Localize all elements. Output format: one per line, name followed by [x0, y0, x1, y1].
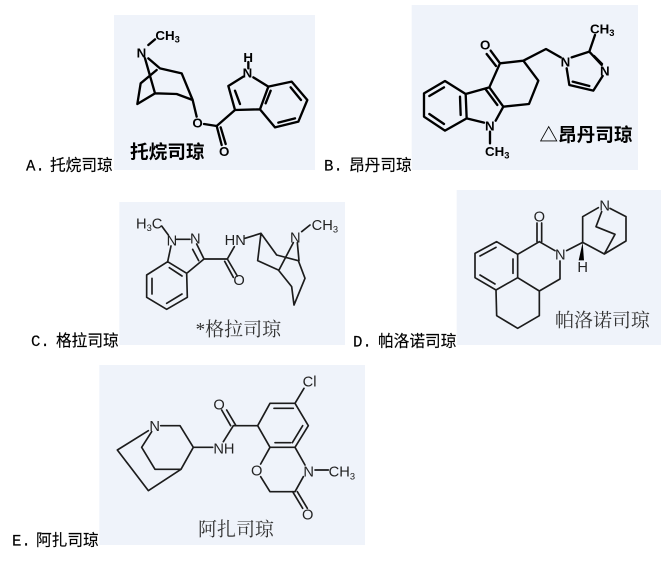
structure: granisetron molecule: N: [190, 231, 201, 247]
panel: D palonosetron: [457, 190, 661, 345]
structure: tropisetron molecule: [137, 28, 307, 159]
panel caption: azasetron: 阿扎司琼: [198, 518, 275, 540]
label: option E: 阿扎司琼: [36, 532, 99, 550]
structure: palonosetron molecule: O: [534, 210, 545, 226]
structure: granisetron molecule: H: [136, 216, 147, 232]
label: option C: 格拉司琼: [56, 332, 119, 351]
structure: ondansetron molecule: [424, 21, 614, 161]
structure: ondansetron molecule: N: [485, 119, 495, 134]
structure: azasetron molecule: N: [149, 419, 160, 435]
structure: palonosetron molecule: N: [555, 247, 566, 263]
structure: azasetron molecule: NH: [213, 441, 235, 457]
structure: azasetron molecule: O: [302, 507, 313, 523]
structure: ondansetron molecule: N: [561, 55, 570, 70]
structure: azasetron molecule: N: [303, 464, 314, 480]
panel: A tropisetron: [114, 15, 315, 170]
label: option C: C.: [31, 333, 50, 351]
structure: tropisetron molecule: H: [243, 50, 253, 65]
structure: tropisetron molecule: O: [219, 144, 229, 159]
structure: granisetron molecule: HN: [225, 233, 246, 249]
structure: palonosetron molecule: N: [599, 198, 610, 214]
panel: B ondansetron: [412, 5, 638, 170]
panel: C granisetron: [119, 202, 345, 345]
structure: granisetron molecule: CH: [312, 218, 333, 234]
panel caption: tropisetron: 托烷司琼: [130, 142, 205, 163]
panel caption: granisetron: *格拉司琼: [196, 319, 282, 341]
structure: ondansetron molecule: 3: [609, 28, 614, 38]
panel caption: palonosetron: 帕洛诺司琼: [555, 310, 651, 332]
structure: ondansetron molecule: CH: [485, 144, 504, 159]
structure: ondansetron molecule: O: [480, 37, 490, 52]
panel caption: ondansetron: △昂丹司琼: [539, 125, 633, 146]
structure: tropisetron molecule: N: [243, 65, 252, 80]
structure: granisetron molecule: [136, 216, 338, 309]
structure: tropisetron molecule: N: [137, 45, 146, 60]
structure: palonosetron molecule: H: [577, 260, 588, 276]
structure: tropisetron molecule: O: [192, 115, 203, 130]
structure: tropisetron molecule: 3: [175, 35, 180, 45]
structure: granisetron molecule: 3: [333, 225, 338, 235]
label: option A: 托烷司琼: [50, 156, 113, 176]
structure: granisetron molecule: 3: [147, 223, 152, 233]
label: option A: A.: [26, 158, 45, 176]
structure: granisetron molecule: C: [152, 216, 163, 232]
label: option B: 昂丹司琼: [349, 156, 412, 176]
structure: tropisetron molecule: CH: [155, 28, 175, 43]
label: option D: 帕洛诺司琼: [378, 332, 456, 352]
structure: azasetron molecule: O: [251, 464, 262, 480]
structure: azasetron molecule: [117, 375, 355, 523]
structure: palonosetron molecule: [475, 198, 626, 328]
structure: ondansetron molecule: 3: [504, 151, 509, 161]
label: option D: D.: [353, 334, 372, 352]
label: option E: E.: [12, 532, 31, 550]
structure: azasetron molecule: O: [213, 397, 225, 413]
panel: E azasetron: [99, 365, 365, 545]
structure: azasetron molecule: Cl: [303, 375, 317, 391]
label: option B: B.: [324, 158, 343, 176]
structure: granisetron molecule: O: [233, 273, 245, 289]
structure: granisetron molecule: N: [167, 233, 177, 249]
structure: granisetron molecule: N: [290, 230, 301, 246]
structure: ondansetron molecule: CH: [590, 21, 609, 36]
structure: azasetron molecule: CH: [329, 465, 350, 481]
structure: azasetron molecule: 3: [350, 471, 355, 481]
structure: ondansetron molecule: N: [600, 63, 610, 78]
